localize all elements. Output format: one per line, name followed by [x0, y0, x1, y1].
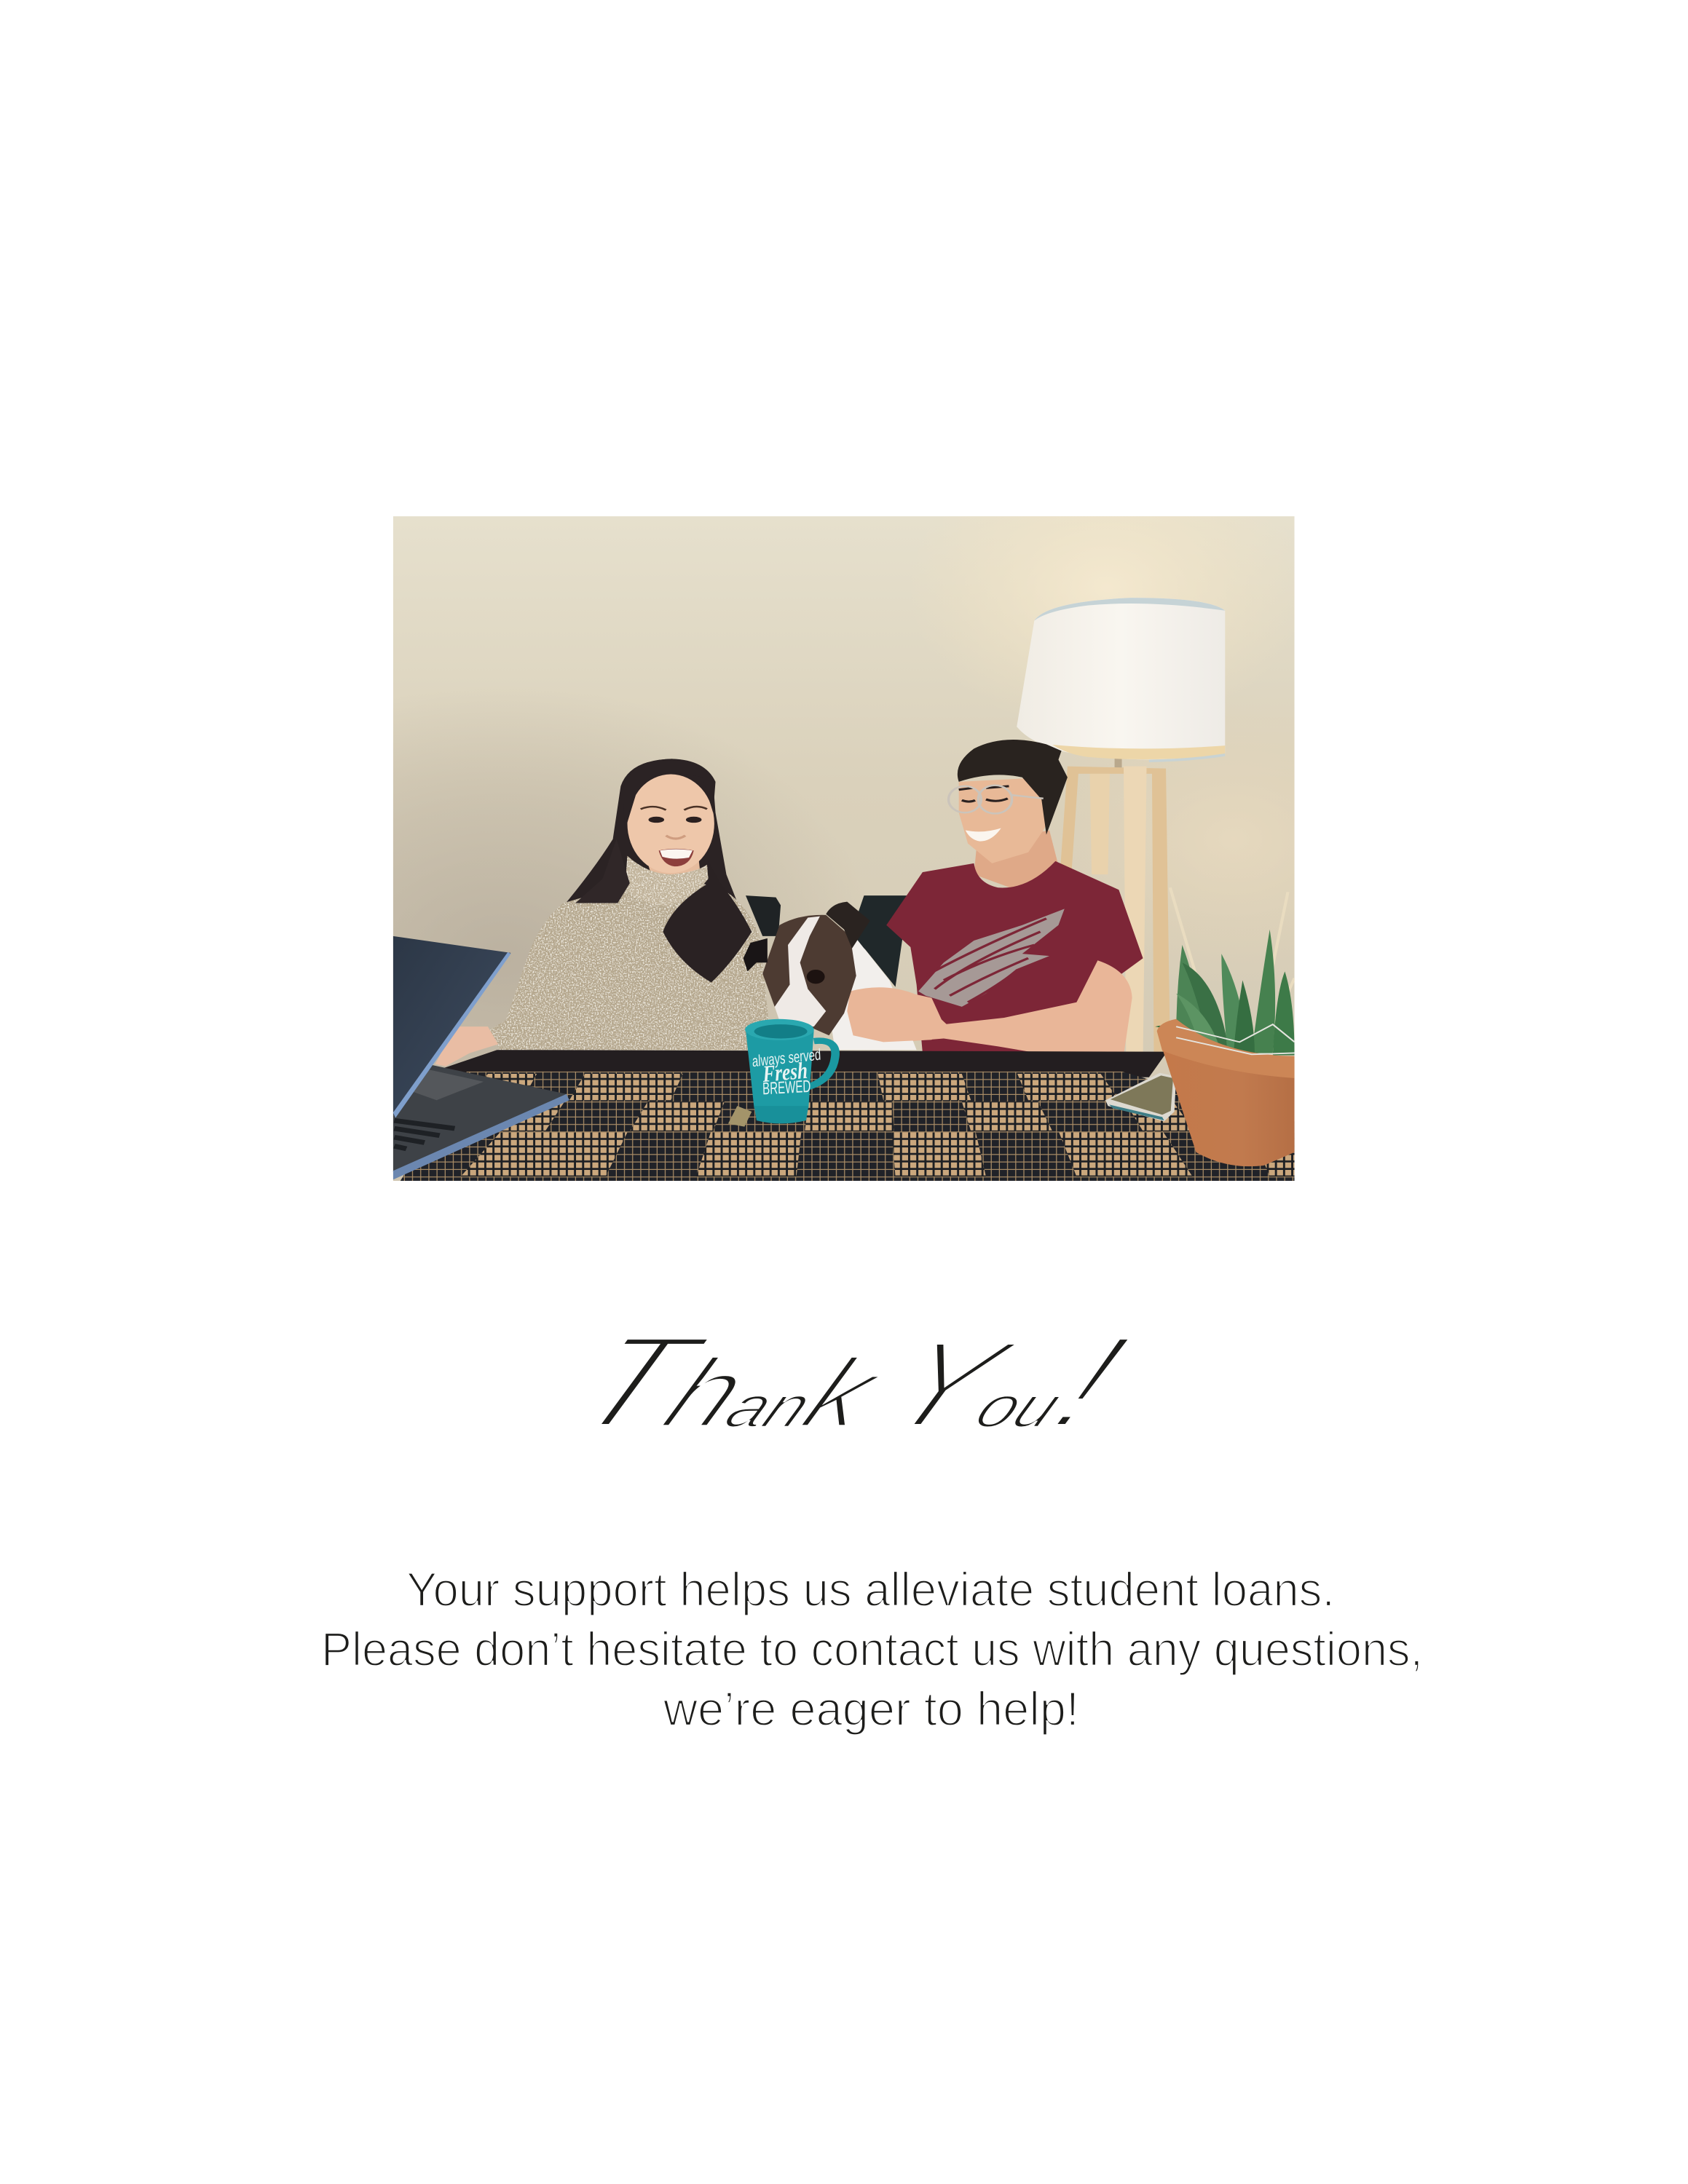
man — [886, 740, 1143, 1051]
face — [958, 778, 1046, 863]
smile — [966, 828, 1001, 842]
laptop base — [393, 1064, 567, 1172]
aloe leaves — [1176, 945, 1207, 1046]
table — [443, 1050, 1167, 1077]
eyes — [641, 807, 707, 810]
message text: Your support helps us alleviate student loans. — [406, 1562, 1335, 1616]
arm and hand — [913, 960, 1132, 1051]
mug lettering: Fresh — [762, 1058, 808, 1088]
turtleneck — [625, 856, 709, 906]
mug lettering: BREWED — [762, 1077, 811, 1099]
hand on laptop — [435, 1026, 498, 1067]
body — [829, 936, 917, 1050]
mug lettering: always served — [752, 1045, 821, 1070]
tea tag — [728, 1106, 752, 1127]
wall background — [393, 516, 1295, 1181]
message text — [321, 1562, 1423, 1736]
teal mug — [745, 1019, 835, 1123]
blaze and muzzle — [775, 917, 826, 1026]
message text: Please don’t hesitate to contact us with any questions, — [321, 1622, 1423, 1676]
eyebrows and eyes — [959, 786, 1009, 802]
plant sticks — [1170, 887, 1295, 1053]
eye — [807, 970, 825, 984]
front hair — [663, 878, 752, 983]
potted aloe plant — [1155, 887, 1295, 1166]
head — [762, 915, 856, 1035]
neck — [648, 861, 700, 875]
shirt print — [918, 909, 1065, 1007]
keyboard keys — [394, 1120, 454, 1149]
mouth — [659, 849, 694, 866]
laptop — [393, 936, 569, 1179]
hair behind — [567, 759, 737, 903]
hair — [958, 740, 1068, 835]
chairs — [746, 895, 909, 987]
mug lettering — [752, 1045, 821, 1099]
floor lamp — [1017, 598, 1225, 1058]
glasses — [949, 786, 1044, 813]
pot — [1162, 1048, 1295, 1166]
plant wire — [1176, 1024, 1295, 1054]
nose — [666, 836, 685, 839]
t-shirt — [886, 861, 1143, 1055]
placemat — [401, 1072, 1295, 1181]
phone — [1105, 1073, 1176, 1121]
neck — [974, 830, 1058, 892]
dog — [744, 902, 947, 1050]
heading: Thank You!: Thank You! — [550, 1308, 1149, 1455]
sweater — [488, 883, 775, 1050]
photo: couple with dog at a table — [393, 516, 1295, 1181]
message text: we’re eager to help! — [663, 1682, 1079, 1736]
laptop lid — [393, 936, 510, 1116]
woman — [435, 759, 775, 1067]
ears — [744, 938, 768, 971]
face — [627, 775, 714, 873]
